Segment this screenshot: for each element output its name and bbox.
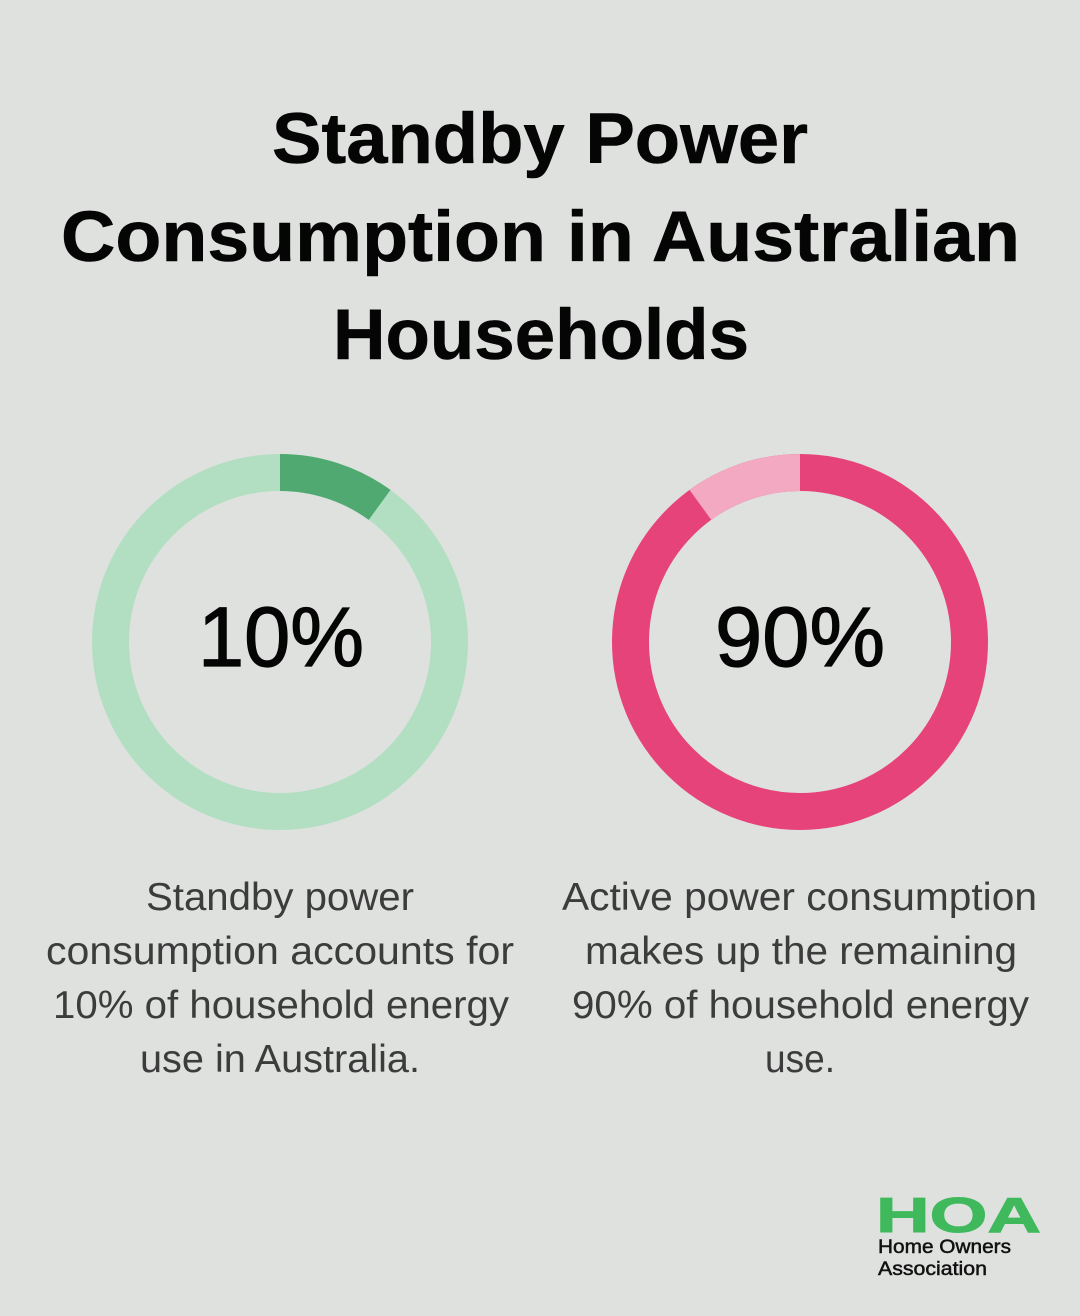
logo: HOA Home Owners Association (876, 1189, 1041, 1280)
value: 10%: 10% (198, 590, 364, 684)
title: Households (333, 296, 749, 375)
description: active power: use. (765, 1038, 835, 1081)
logo: HOA Home Owners Association: HOA (876, 1189, 1041, 1243)
description: standby power: 10% of household energy (53, 984, 510, 1027)
description: standby power: use in Australia. (140, 1038, 420, 1081)
logo: HOA Home Owners Association: Home Owners (878, 1236, 1011, 1258)
description: active power: Active power consumption (562, 876, 1037, 919)
value: 90%: 90% (715, 590, 885, 684)
donut chart: 10% (110, 472, 450, 812)
title (61, 100, 1020, 375)
donut chart: 90% (630, 472, 970, 812)
panel: standby power (46, 472, 514, 1081)
title: Consumption in Australian (61, 198, 1020, 277)
description: standby power: consumption accounts for (46, 930, 514, 973)
logo: HOA Home Owners Association: Association (878, 1258, 987, 1280)
description: standby power: Standby power (146, 876, 414, 919)
description: active power: 90% of household energy (572, 984, 1030, 1027)
description: standby power (46, 876, 514, 1081)
panel: active power (562, 472, 1037, 1081)
title: Standby Power (272, 100, 808, 179)
description: active power (562, 876, 1037, 1081)
description: active power: makes up the remaining (585, 930, 1017, 973)
